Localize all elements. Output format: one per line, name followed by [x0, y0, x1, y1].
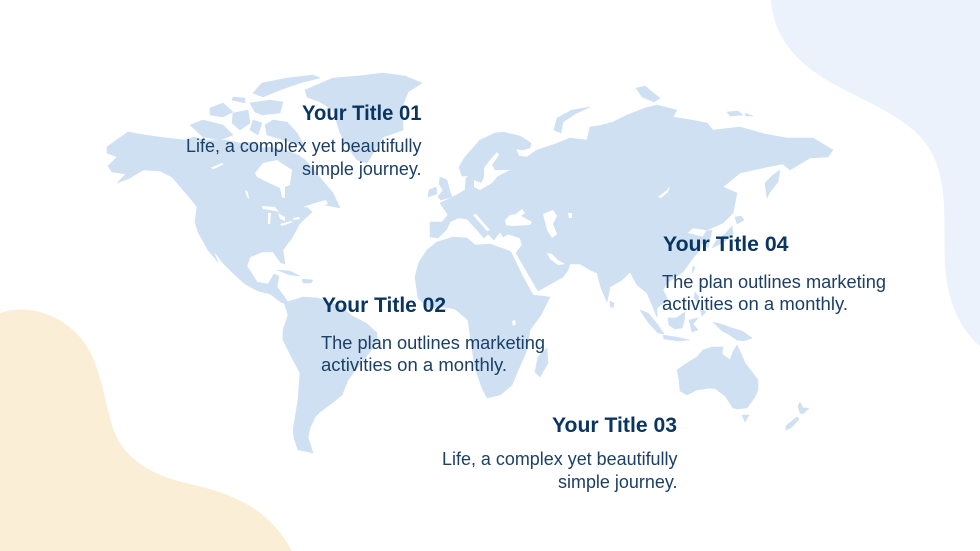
map: Australia	[677, 345, 758, 409]
map: Novaya Zemlya	[554, 107, 590, 133]
text block: Your Title 02	[321, 294, 545, 375]
decorative blob: bottom left	[0, 309, 292, 551]
map: South America	[283, 297, 377, 453]
water: Hudson Bay	[255, 160, 292, 198]
map: Sakhalin	[765, 170, 780, 198]
water: Lake Baikal	[658, 186, 670, 198]
text block: Your Title 04: The plan outlines marketing	[662, 272, 886, 292]
decorative blob: top right	[771, 0, 980, 346]
text block: Your Title 04: Your Title 04	[663, 233, 789, 256]
map: inland water cutouts	[210, 152, 670, 326]
water: Caspian Sea	[543, 210, 557, 238]
text block: Your Title 02: activities on a monthly.	[321, 355, 507, 375]
map: Svalbard	[636, 86, 660, 102]
map: Tasmania	[742, 415, 749, 422]
map: Japan	[712, 216, 744, 248]
map: Central American islands	[277, 270, 313, 283]
map: Arctic islands	[190, 75, 320, 147]
water: Black Sea	[505, 209, 532, 226]
water: northern Canadian lakes	[210, 163, 249, 199]
text block: Your Title 03: simple journey.	[558, 472, 678, 492]
water: Baltic Sea	[474, 152, 510, 190]
text block: Your Title 01: Your Title 01	[302, 102, 422, 125]
text block: Your Title 01: simple journey.	[302, 159, 422, 179]
map: North America	[107, 132, 340, 303]
map: Severnaya Zemlya	[727, 111, 753, 116]
map: Madagascar	[535, 348, 548, 377]
text block: Your Title 04	[662, 233, 886, 314]
map: Eurasia	[430, 105, 833, 317]
map: Borneo and Sulawesi	[668, 312, 698, 332]
water: Persian Gulf	[547, 253, 565, 265]
text block: Your Title 01: Life, a complex yet beautifully	[186, 136, 422, 156]
water: Lake Victoria	[512, 320, 516, 326]
map: Greenland	[305, 73, 422, 163]
text block: Your Title 03: Your Title 03	[552, 414, 677, 437]
water: Aral Sea	[568, 213, 572, 218]
map: Great Britain and Ireland	[428, 177, 452, 200]
water: Adriatic Sea	[473, 214, 490, 231]
world map	[107, 73, 833, 453]
water: Great Lakes	[262, 206, 300, 226]
map: New Guinea	[713, 322, 752, 341]
map: New Zealand	[786, 402, 809, 430]
text block: Your Title 03	[442, 414, 678, 492]
text block: Your Title 02: The plan outlines marketing	[321, 333, 545, 353]
water: Gulf of St Lawrence	[303, 200, 328, 208]
map: Philippines	[694, 292, 706, 316]
text block: Your Title 03: Life, a complex yet beautifully	[442, 449, 678, 469]
text block: Your Title 04: activities on a monthly.	[662, 294, 848, 314]
text block: Your Title 01	[186, 102, 422, 179]
map: Sri Lanka and Taiwan	[610, 266, 695, 308]
text block: Your Title 02: Your Title 02	[322, 294, 446, 317]
map: Africa	[415, 237, 550, 398]
map: Sumatra and Java	[640, 310, 690, 341]
